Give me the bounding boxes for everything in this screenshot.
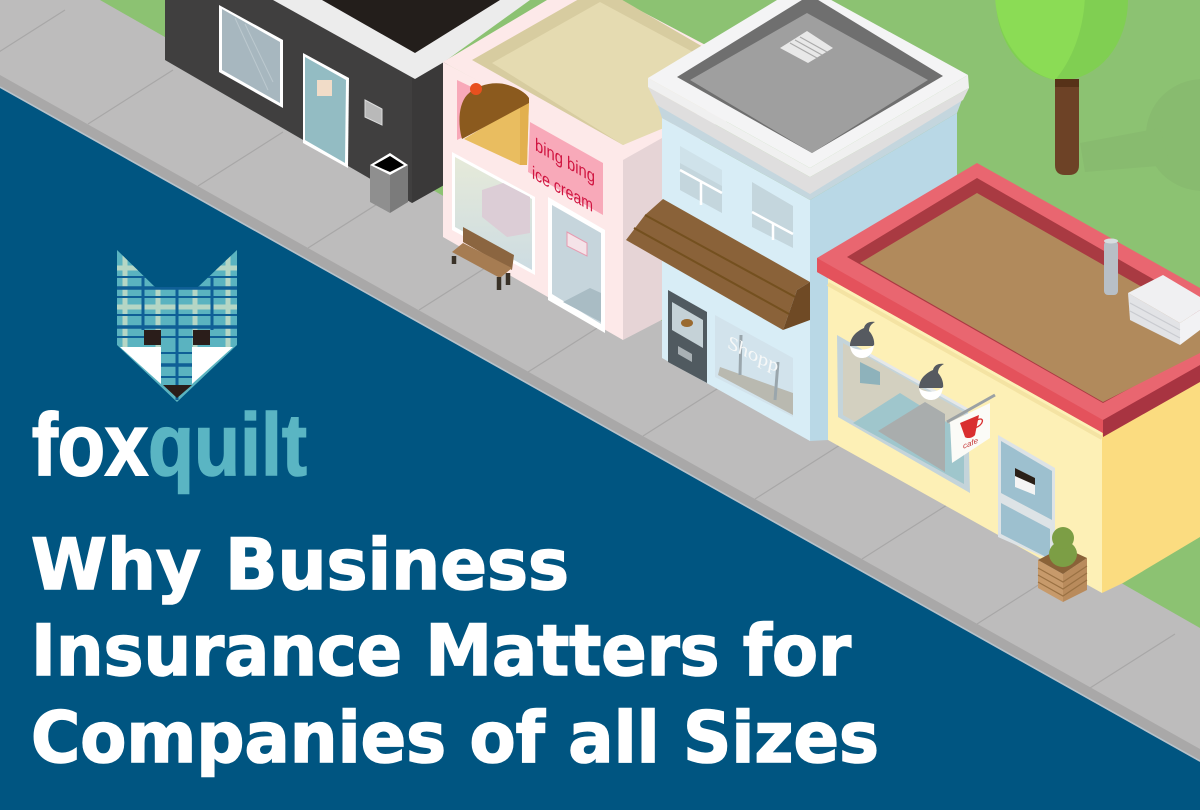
building: blue shop — [626, 0, 969, 441]
building: ice cream shop — [443, 0, 810, 340]
dark shop door — [303, 53, 349, 168]
shop window with display — [715, 315, 793, 417]
wall lamp right — [919, 364, 944, 400]
wall plaque — [365, 100, 382, 125]
shop window with display: Shopp — [728, 330, 778, 378]
title: Why Business — [31, 524, 569, 606]
cafe roof — [817, 163, 1200, 437]
planter with bush — [1038, 527, 1087, 602]
trash bin — [370, 153, 408, 213]
shop sign: bing bing ice cream: ice cream — [532, 162, 593, 217]
building: dark shop — [165, 0, 530, 203]
cafe window — [837, 335, 970, 493]
ice cream shop roof — [443, 0, 810, 160]
cafe hanging sign: cafe — [963, 435, 978, 451]
fox eyes — [144, 330, 210, 345]
logo: wordmark foxquilt: fox — [32, 395, 148, 494]
cafe hanging sign — [947, 395, 995, 463]
shop window — [452, 152, 535, 275]
fox nose — [163, 385, 192, 398]
logo: wordmark foxquilt — [32, 395, 307, 494]
cafe door — [998, 435, 1055, 562]
tree shadow on grass — [1080, 79, 1200, 191]
dark door — [668, 290, 707, 383]
roof vent — [780, 31, 833, 63]
fox cheeks — [120, 347, 233, 384]
title — [31, 524, 879, 779]
dark shop roof — [273, 0, 530, 79]
title: Insurance Matters for — [31, 610, 851, 692]
tree — [995, 0, 1128, 175]
building: cafe — [817, 163, 1200, 593]
shop door — [548, 197, 605, 333]
logo: fox head — [117, 250, 237, 402]
bench — [452, 227, 514, 290]
upper window right — [752, 182, 793, 248]
blue shop roof — [648, 0, 969, 200]
shop sign: bing bing ice cream — [528, 122, 603, 217]
air conditioner — [1128, 275, 1200, 345]
awning — [626, 199, 810, 330]
upper window left — [680, 146, 722, 213]
dark shop window — [219, 5, 283, 108]
ice cream cone sign — [457, 80, 529, 165]
chimney — [1104, 238, 1118, 295]
wall lamp left — [850, 322, 875, 358]
title: Companies of all Sizes — [31, 697, 879, 779]
shop sign: bing bing ice cream: bing bing — [535, 134, 595, 188]
logo: wordmark foxquilt: quilt — [148, 395, 307, 494]
